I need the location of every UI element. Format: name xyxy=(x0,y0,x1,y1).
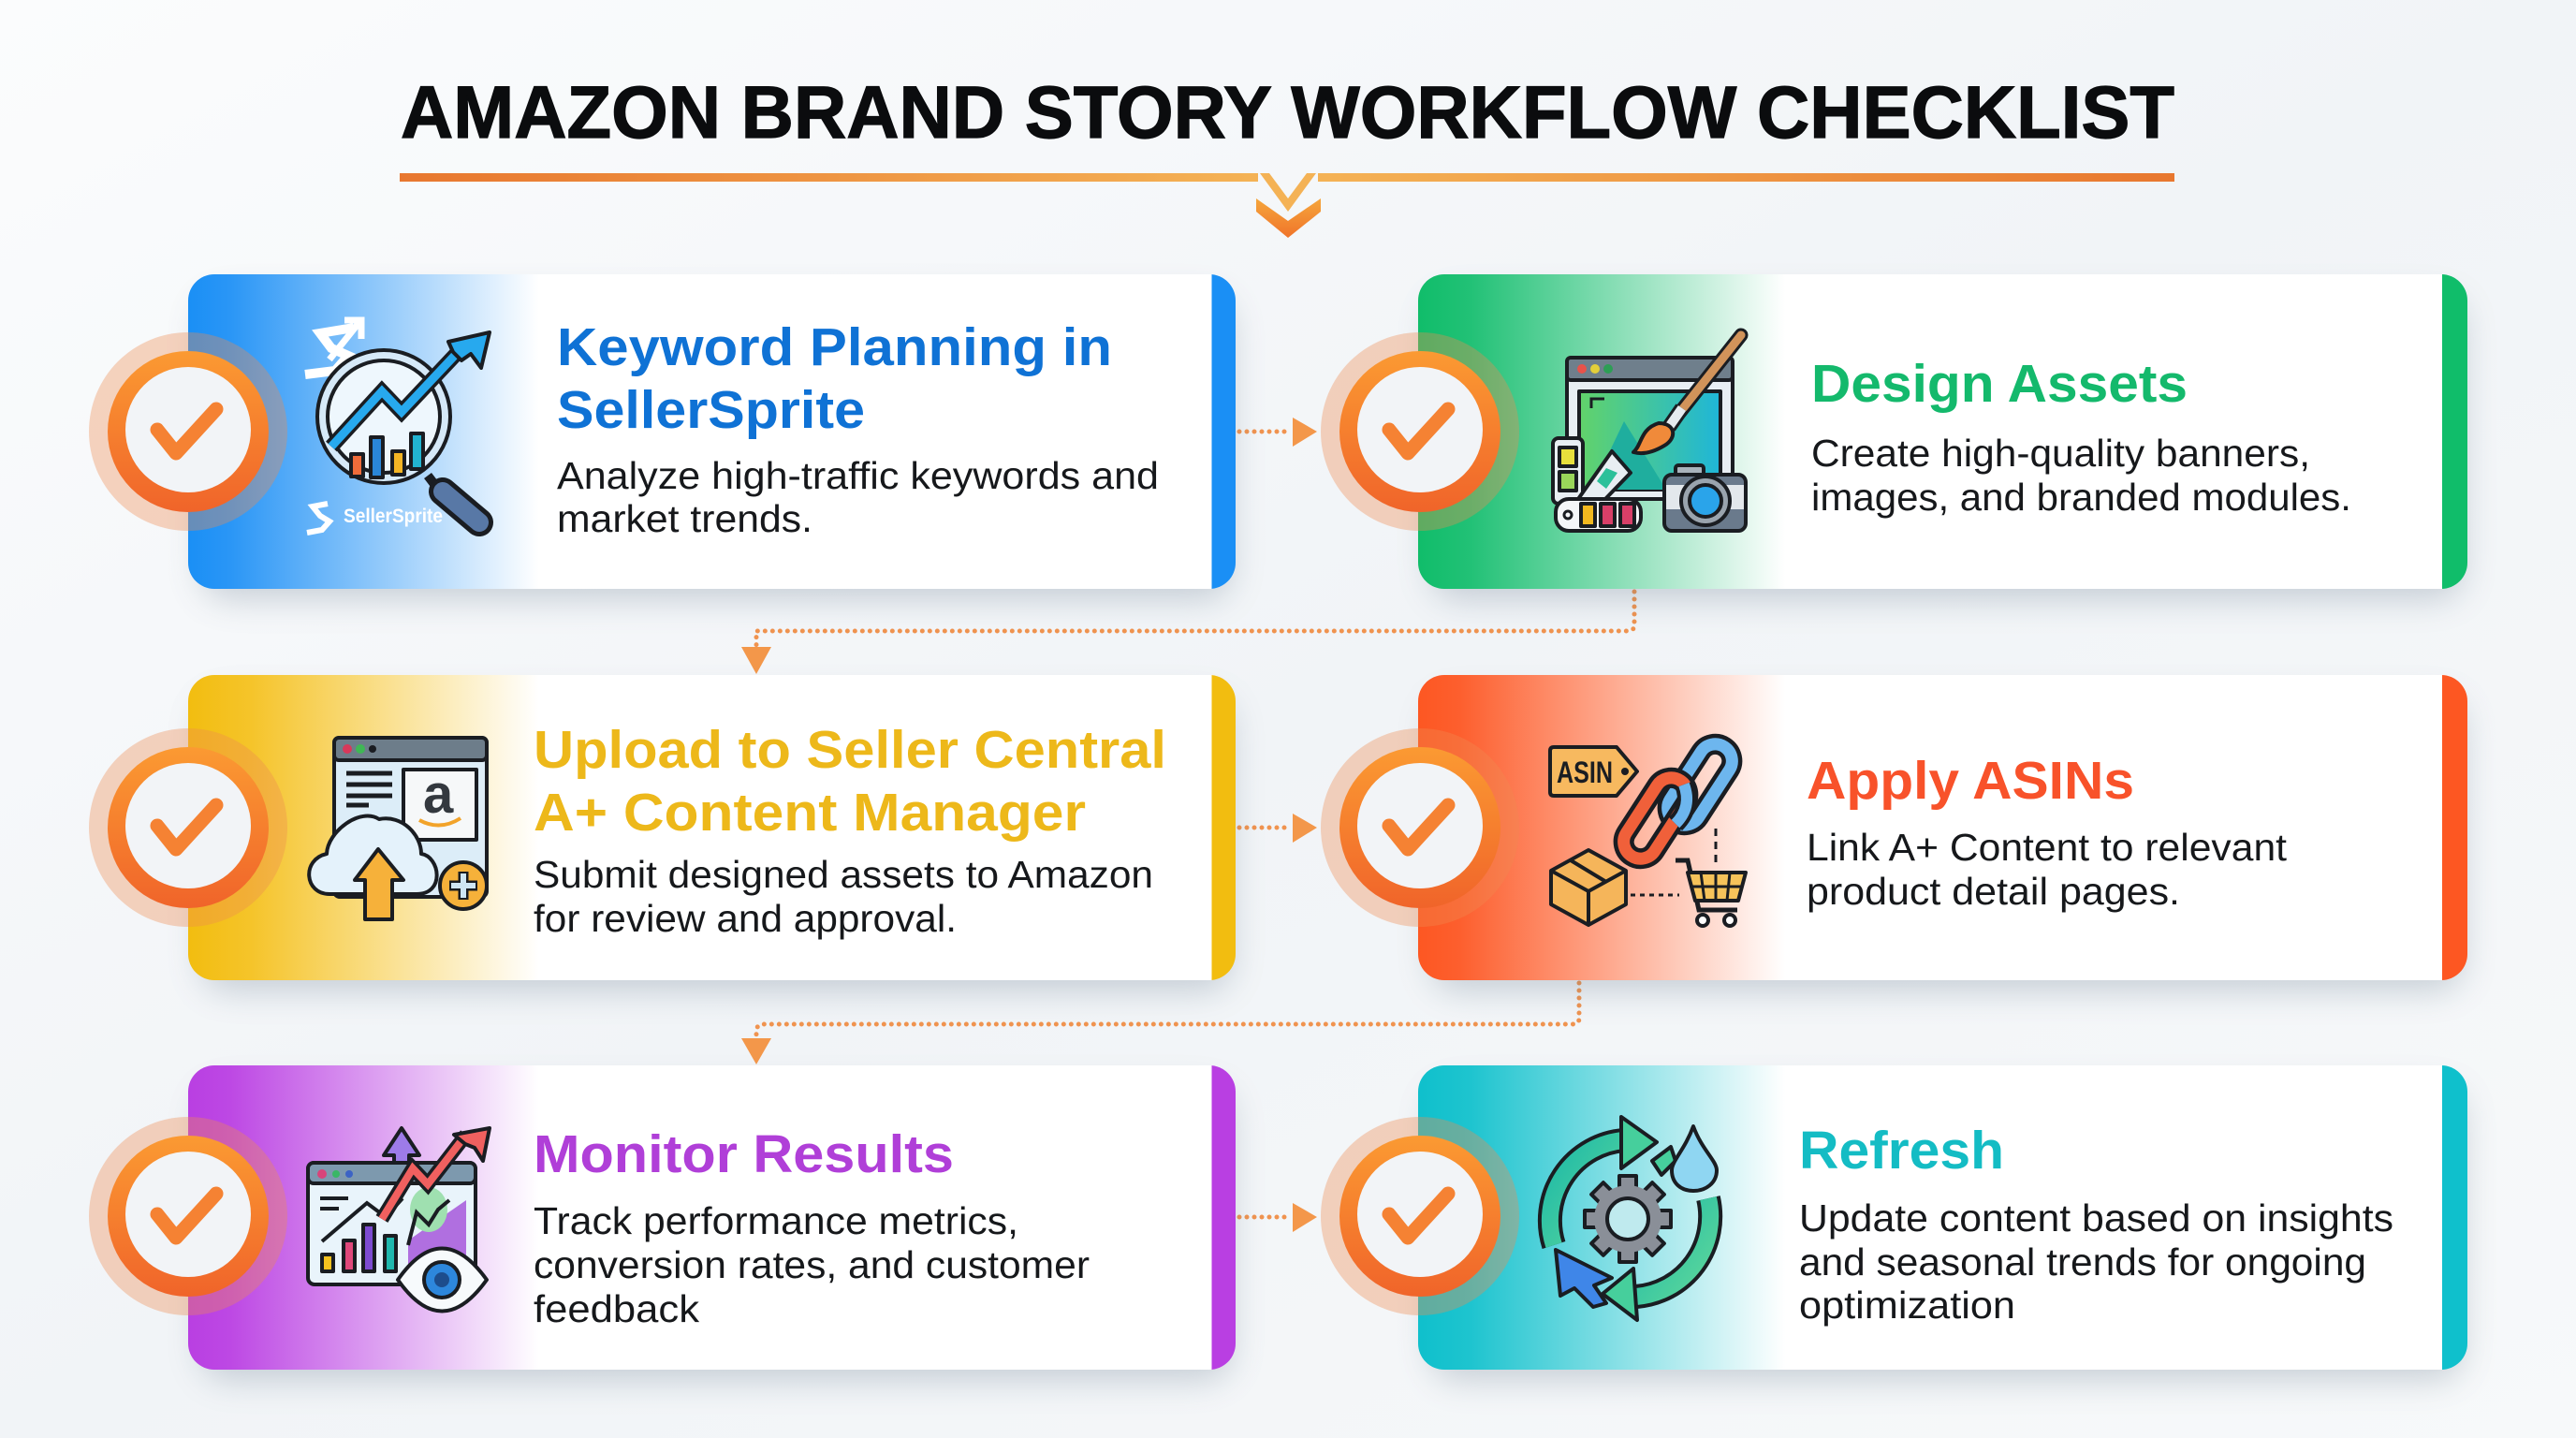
body text line 2: and seasonal trends for ongoing xyxy=(1799,1240,2366,1284)
body text line 2: conversion rates, and customer xyxy=(534,1243,1090,1286)
arrow: apply asins to monitor xyxy=(741,983,1579,1064)
heading: Apply ASINs xyxy=(1807,751,2134,811)
body text: Update content based on insights xyxy=(1799,1196,2393,1240)
body text: Submit designed assets to Amazon xyxy=(534,853,1153,896)
heading: Keyword Planning in xyxy=(557,317,1112,377)
panel: keyword planning xyxy=(89,274,1236,599)
body text line 3: optimization xyxy=(1799,1284,2015,1327)
icon: asin tag, chain links, box and cart xyxy=(1550,738,1746,926)
arrow: monitor to refresh xyxy=(1239,1203,1317,1232)
panel: refresh xyxy=(1321,1065,2467,1380)
panel: monitor results xyxy=(89,1065,1236,1380)
badge: check 5 xyxy=(89,1117,287,1315)
icon: upload browser with cloud and amazon logo: a xyxy=(423,764,454,825)
heading line 2: A+ Content Manager xyxy=(534,783,1086,843)
heading: Design Assets xyxy=(1811,354,2188,414)
heading: Refresh xyxy=(1799,1121,2004,1181)
arrow: upload to apply asins xyxy=(1239,814,1317,843)
badge: check 3 xyxy=(89,728,287,927)
arrow: design assets to upload xyxy=(741,592,1634,674)
badge: check 2 xyxy=(1321,332,1519,531)
icon: asin tag, chain links, box and cart: ASIN xyxy=(1557,756,1613,789)
badge: check 4 xyxy=(1321,728,1519,927)
body text line 2: market trends. xyxy=(557,497,812,540)
body text line 2: images, and branded modules. xyxy=(1811,476,2351,519)
body text: Link A+ Content to relevant xyxy=(1807,826,2288,869)
title underline with chevrons xyxy=(400,173,2174,238)
body text line 3: feedback xyxy=(534,1287,700,1330)
icon: magnifier with growth chart and SellerSprite logo xyxy=(305,320,490,533)
badge: check 6 xyxy=(1321,1117,1519,1315)
panel: design assets xyxy=(1321,274,2467,599)
body text: Analyze high-traffic keywords and xyxy=(557,454,1159,497)
heading line 2: SellerSprite xyxy=(557,380,865,440)
body text line 2: product detail pages. xyxy=(1807,870,2180,913)
icon: analytics window with arrows and eye xyxy=(308,1128,490,1311)
panel: apply asins xyxy=(1321,675,2467,990)
icon: refresh arrows, gear and water drop xyxy=(1550,1117,1717,1320)
body text line 2: for review and approval. xyxy=(534,897,957,940)
badge: check 1 xyxy=(89,332,287,531)
body text: Track performance metrics, xyxy=(534,1199,1018,1242)
icon: magnifier with growth chart and SellerSprite logo: SellerSprite xyxy=(344,506,443,527)
title: AMAZON BRAND STORY WORKFLOW CHECKLIST xyxy=(401,70,2174,154)
icon: design window, brush, swatches and camera xyxy=(1553,335,1746,531)
arrow: keyword planning to design assets xyxy=(1239,418,1317,447)
panel: upload to seller central xyxy=(89,675,1236,990)
body text: Create high-quality banners, xyxy=(1811,432,2310,475)
heading: Monitor Results xyxy=(534,1124,954,1184)
icon: upload browser with cloud and amazon logo xyxy=(309,738,487,919)
heading: Upload to Seller Central xyxy=(534,720,1166,780)
